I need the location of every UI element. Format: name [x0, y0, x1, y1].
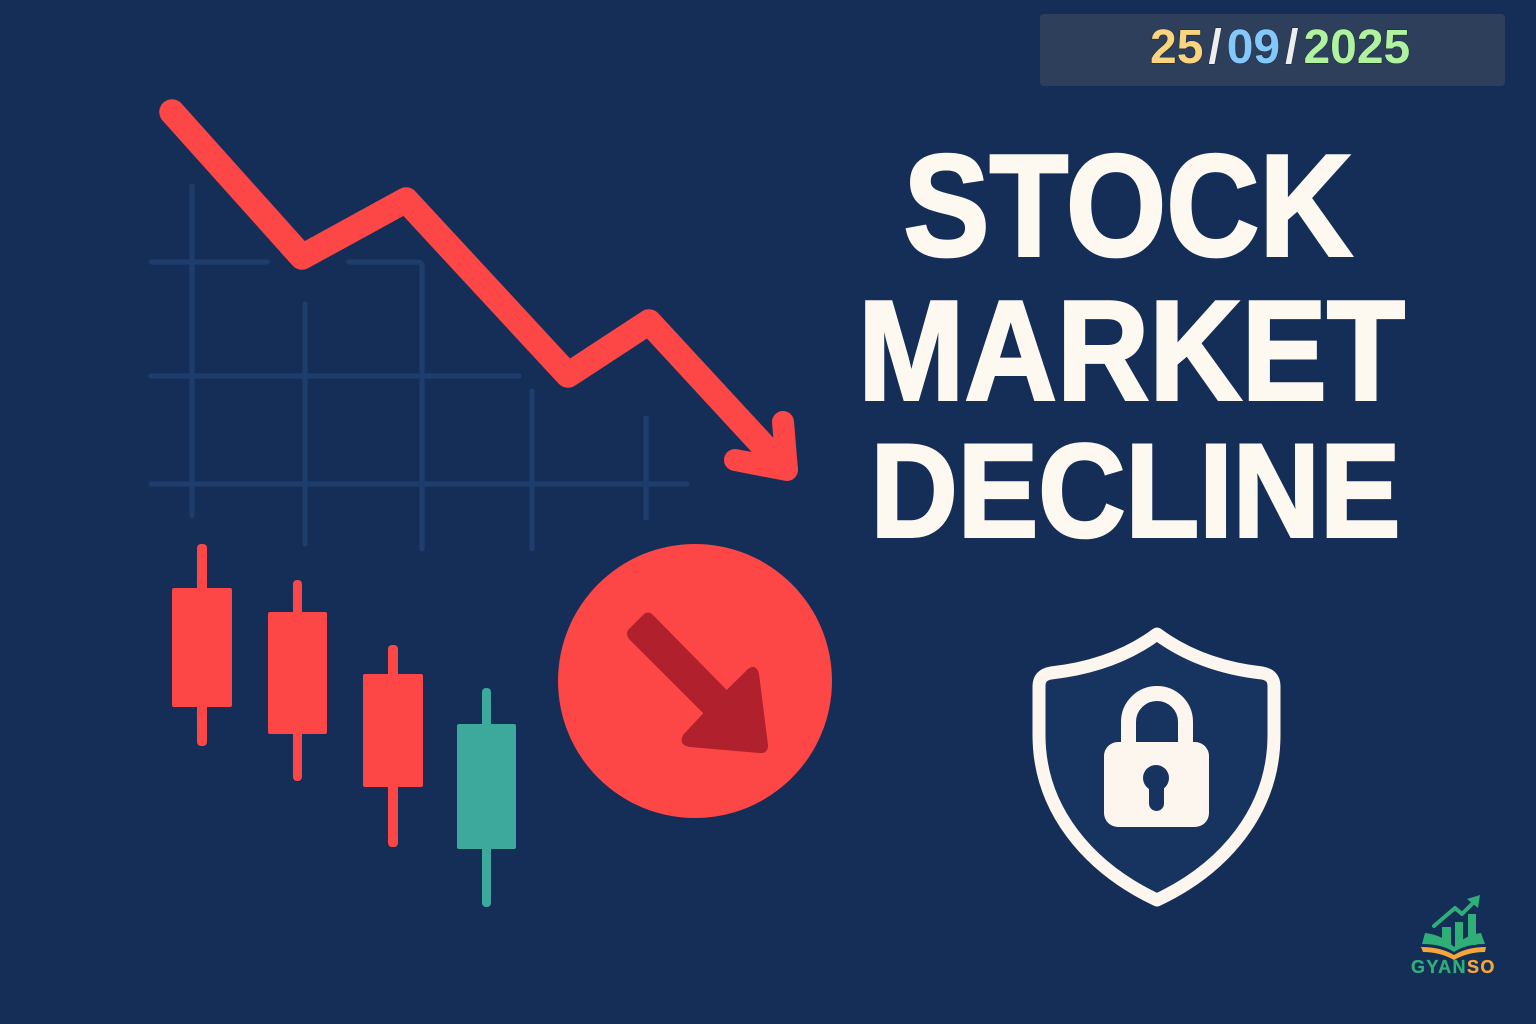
chart grid background [151, 186, 687, 549]
candlestick chart [172, 544, 516, 907]
candlestick 3 [363, 645, 423, 847]
GYANSO logo [1411, 895, 1496, 977]
logo wordmark: GYANSO [1411, 957, 1496, 977]
logo trend arrow [1434, 903, 1473, 926]
logo bars [1442, 914, 1476, 946]
date badge [1040, 14, 1505, 86]
red circle with down arrow icon [558, 544, 832, 818]
title: DECLINE [870, 418, 1400, 566]
title: STOCK [904, 124, 1352, 286]
title [858, 124, 1405, 566]
candlestick 4 [457, 688, 516, 907]
logo open book [1422, 933, 1485, 952]
declining trend line arrow [172, 112, 787, 470]
shield with padlock icon [1039, 634, 1274, 900]
candlestick 1 [172, 544, 232, 746]
padlock [1104, 694, 1209, 827]
title: MARKET [858, 272, 1405, 430]
candlestick 2 [268, 580, 327, 781]
date badge: 25/09/2025 [1150, 21, 1410, 74]
